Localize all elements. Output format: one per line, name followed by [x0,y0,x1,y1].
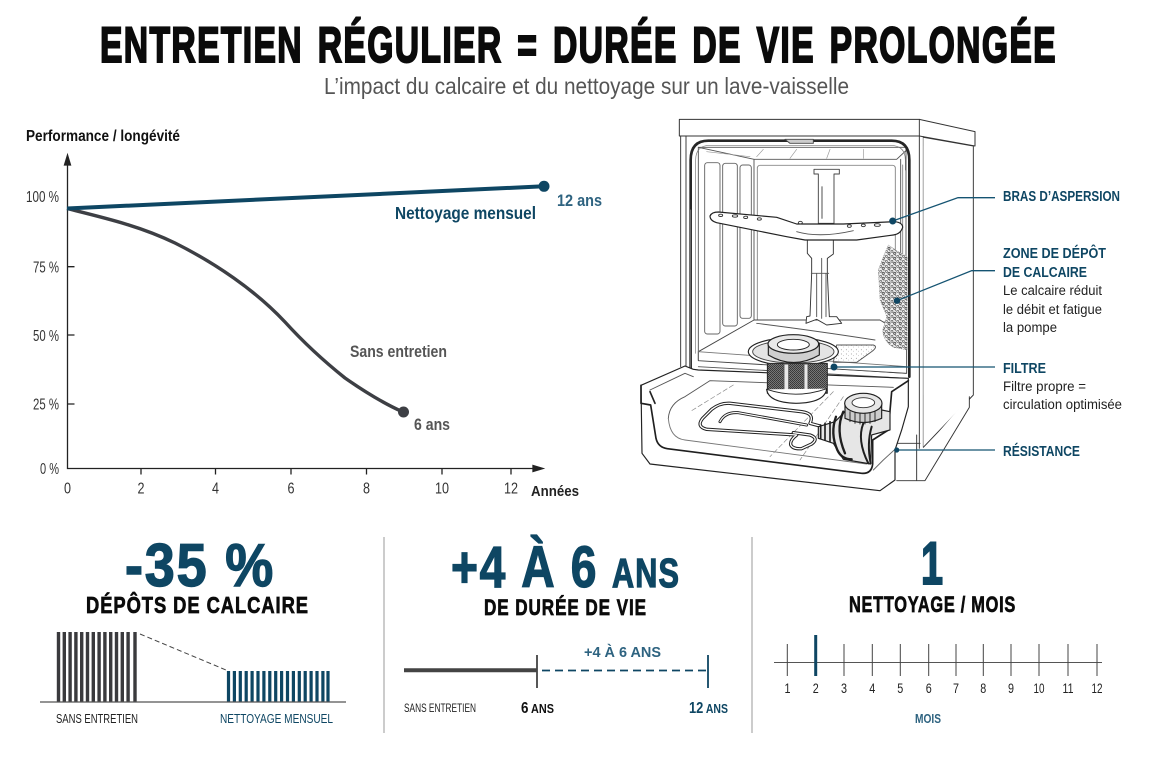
heading: NETTOYAGE / MOIS [849,592,1016,617]
stat: +4 à 6 ans: +4 À 6 [451,535,598,600]
month numbers: 1 [784,680,791,696]
y axis title: Performance / longévité [26,128,180,145]
x axis labels: 0 [64,480,71,498]
callout: zone de dépôt de calcaire: la pompe [1003,320,1057,335]
month numbers: 3 [841,680,847,696]
callout: filtre: FILTRE [1003,361,1046,377]
callout: bras d'aspersion: BRAS D’ASPERSION [1003,189,1120,205]
month numbers: 5 [897,680,903,696]
label: mois: MOIS [915,712,941,726]
month numbers: 6 [926,680,932,696]
spray arm column [806,169,842,325]
line chart [26,128,602,500]
label: +4 à 6 ans: +4 À 6 ANS [584,644,661,661]
curve: nettoyage mensuel [67,181,550,208]
x axis labels: 2 [138,480,144,498]
bars: nettoyage mensuel [228,671,328,702]
stat: -35 %: -35 % [125,532,275,599]
callout: filtre: circulation optimisée [1003,397,1122,412]
leader: zone de dépôt [894,271,995,304]
panel: nettoyage par mois [774,530,1103,726]
y axis labels: 25 % [33,396,59,414]
x axis labels: 4 [212,480,219,498]
baseline [40,701,346,703]
tub floor [698,320,907,378]
callout: filtre [1003,361,1122,412]
label: sans entretien: SANS ENTRETIEN [56,711,138,726]
tub interior [698,147,907,373]
callout: résistance: RÉSISTANCE [1003,443,1080,460]
x axis labels: 12 [504,480,518,498]
month numbers [784,680,1103,696]
y axis labels: 0 % [40,461,59,478]
heading: DÉPÔTS DE CALCAIRE [86,591,309,618]
callout: zone de dépôt de calcaire [1003,244,1106,335]
month numbers: 12 [1092,680,1103,696]
cabinet [679,119,975,481]
leader: filtre [830,364,995,370]
label: nettoyage mensuel: Nettoyage mensuel [395,203,536,223]
leader: bras d'aspersion [889,198,995,224]
panel: dépôts de calcaire [40,532,346,726]
month numbers: 10 [1034,680,1045,696]
label: 12 ans: 12 ANS [689,700,728,717]
y axis labels [26,189,59,478]
filter [748,335,838,403]
label: 6 ans: 6 ANS [521,700,554,717]
callout: zone de dépôt de calcaire: DE CALCAIRE [1003,265,1087,281]
door lower part [641,366,908,491]
subtitle: L’impact du calcaire et du nettoyage sur un lave-vaisselle [324,73,849,99]
heating element [700,403,820,449]
spray arm [710,212,903,240]
y axis labels: 100 % [26,189,59,206]
month numbers: 9 [1008,680,1014,696]
month scale [774,635,1102,676]
callout: zone de dépôt de calcaire: Le calcaire réduit [1003,283,1102,298]
callout: filtre: Filtre propre = [1003,379,1086,394]
month numbers: 2 [813,680,819,696]
label: nettoyage mensuel: NETTOYAGE MENSUEL [220,711,333,726]
callout: zone de dépôt de calcaire: le débit et fatigue [1003,302,1102,317]
stat: +4 à 6 ans: ANS [612,550,680,596]
bars: sans entretien [58,632,135,702]
y axis labels: 75 % [33,260,59,276]
x axis labels: 6 [288,480,294,498]
label: sans entretien: Sans entretien [350,343,447,361]
dishwasher illustration [641,119,975,491]
x axis labels: 8 [363,480,370,498]
month numbers: 8 [980,680,986,696]
dashed connector [140,634,226,670]
month numbers: 11 [1062,680,1074,696]
limescale deposit [878,245,907,350]
leader: résistance [894,447,995,453]
curve: sans entretien [67,208,409,418]
panel: durée de vie [404,535,728,717]
door gasket [691,141,909,378]
y axis labels: 50 % [33,328,59,345]
label: 12 ans: 12 ans [557,191,602,210]
callout: zone de dépôt de calcaire: ZONE DE DÉPÔT [1003,244,1106,262]
timeline [404,655,708,688]
x axis labels [64,480,518,498]
callout leaders [830,198,995,453]
axes [64,155,543,474]
month numbers: 4 [869,680,875,696]
pump [818,393,890,464]
x axis labels: 10 [435,480,449,498]
label: 6 ans: 6 ans [414,416,450,434]
heading: DE DURÉE DE VIE [484,595,647,620]
month numbers: 7 [953,680,959,696]
stat: 1: 1 [921,530,943,597]
x axis title: Années [531,483,579,500]
label: sans entretien: SANS ENTRETIEN [404,701,476,715]
